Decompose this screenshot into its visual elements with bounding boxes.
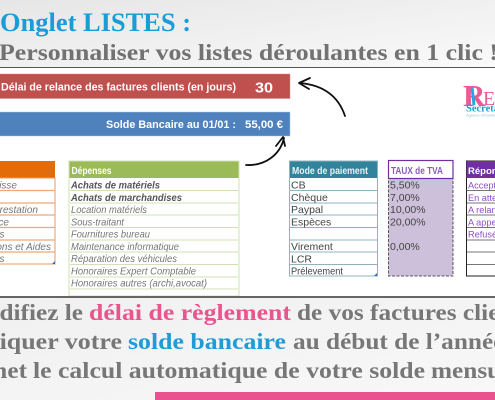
line 1: délai de règlement [0, 300, 495, 326]
table: dépenses (green): Fournitures bureau [71, 228, 150, 240]
table: taux de TVA (purple) [388, 160, 453, 276]
logo: R [463, 78, 486, 113]
table: mode de paiement (teal): Mode de paiement [292, 165, 368, 177]
table: mode de paiement (teal): LCR [291, 254, 312, 266]
line 3: solde mensuel [0, 358, 495, 384]
subtitle: Personnaliser vos listes déroulantes en 1 clic ! [0, 40, 495, 65]
header panel [0, 0, 495, 68]
blue bar: solde bancaire: 55,00 € [245, 119, 283, 131]
line 2: solde bancaire: solde bancaire [128, 329, 286, 354]
red bar: délai de relance [0, 74, 290, 98]
table: dépenses (green): Honoraires autres (archi,avocat) [71, 278, 207, 290]
table: dépenses (green): Honoraires Expert Comptable [71, 266, 196, 278]
table: dépenses (green): Achats de matériels [70, 180, 160, 192]
table: dépenses (green): Location matériels [71, 204, 148, 216]
table: taux de TVA (purple): 20,00% [390, 216, 426, 228]
table: dépenses (green): Dépenses [72, 166, 112, 177]
table: dépenses (green) [69, 161, 239, 296]
pink bar [155, 392, 495, 400]
table: mode de paiement (teal): Prélevement [291, 266, 343, 278]
table: taux de TVA (purple): 7,00% [390, 192, 420, 204]
table: taux de TVA (purple): 10,00% [390, 204, 426, 216]
line 1: délai de règlement: délai de règlement [89, 300, 291, 325]
table: mode de paiement (teal): Espèces [291, 216, 331, 228]
table: mode de paiement (teal): Virement [291, 241, 333, 253]
table: recettes (orange) [0, 161, 55, 265]
table: dépenses (green): Sous-traitant [71, 216, 125, 228]
table: dépenses (green): Maintenance informatique [71, 241, 179, 253]
red bar: délai de relance: Délai de relance des factures clients (en jours) [1, 82, 236, 94]
table: taux de TVA (purple): 0,00% [390, 241, 420, 253]
table: mode de paiement (teal): Paypal [291, 204, 323, 216]
red bar: délai de relance: 30 [255, 80, 273, 96]
table: dépenses (green): Achats de marchandises [70, 192, 182, 204]
table: mode de paiement (teal): Chèque [291, 192, 328, 204]
table: réponse (purple and black) [466, 161, 495, 276]
logo [463, 78, 495, 118]
blue bar: solde bancaire [0, 112, 290, 136]
logo: E [483, 88, 495, 110]
footer panel [0, 296, 495, 400]
table: taux de TVA (purple): 5,50% [390, 180, 420, 192]
arrow to blue bar [246, 137, 285, 165]
table: mode de paiement (teal): CB [291, 180, 306, 192]
arrow to red bar [299, 78, 345, 116]
line 2: solde bancaire [0, 329, 495, 355]
title: Onglet LISTES : [0, 8, 191, 37]
table: taux de TVA (purple): TAUX de TVA [391, 166, 443, 177]
table: dépenses (green): Réparation des véhicules [71, 253, 178, 265]
line 3: solde mensuel: le calcul automatique de votre solde [33, 358, 425, 383]
blue bar: solde bancaire: Solde Bancaire au 01/01 : [106, 119, 236, 131]
table: mode de paiement (teal) [290, 161, 378, 278]
